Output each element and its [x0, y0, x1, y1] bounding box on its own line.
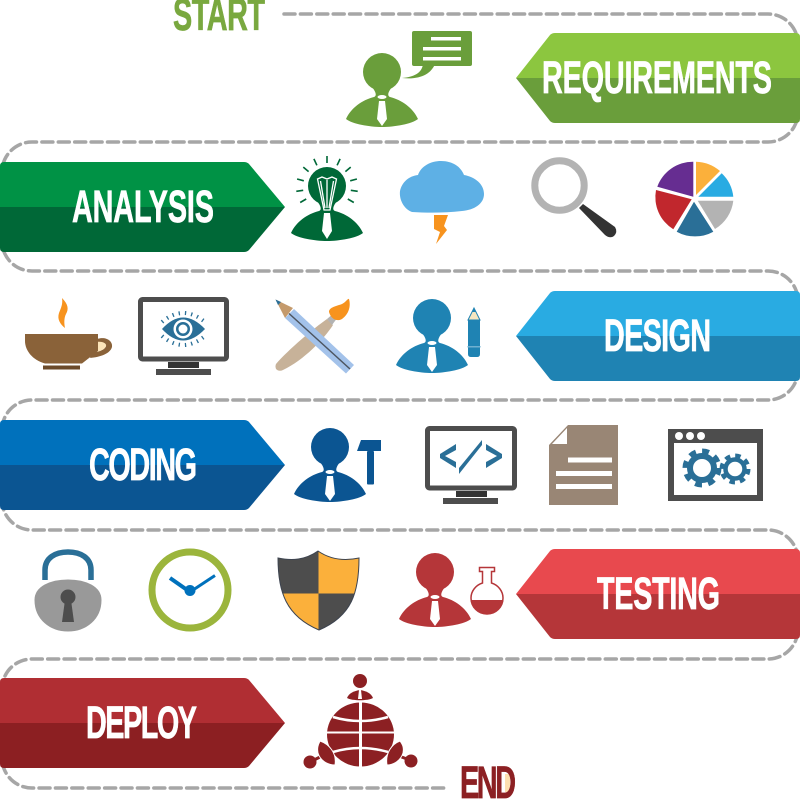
icon: person with hammer — [294, 428, 381, 502]
icon: shield — [278, 550, 360, 630]
icon: person with speech bubble — [346, 31, 472, 127]
banner: coding: CODING — [89, 441, 197, 491]
banner: analysis: ANALYSIS — [72, 183, 214, 233]
icon: browser window with gears — [668, 429, 763, 501]
banner: requirements: REQUIREMENTS — [542, 54, 772, 104]
icon: monitor with eye — [140, 300, 226, 375]
icon: coffee cup — [25, 298, 112, 370]
chart: pie icon — [655, 162, 733, 236]
icon: padlock — [34, 552, 102, 632]
icon: person with pencil — [396, 299, 480, 373]
icon: document — [549, 425, 618, 505]
icon: clock — [152, 552, 228, 628]
banner: coding — [0, 420, 285, 510]
icon: person with flask — [399, 553, 504, 627]
banner: deploy: DEPLOY — [86, 699, 197, 749]
icon: crossed pencil and brush — [276, 299, 354, 374]
icon: storm cloud — [400, 161, 484, 244]
banner: design — [516, 291, 800, 381]
icon: globe with people — [304, 674, 418, 768]
banner: testing: TESTING — [597, 570, 720, 620]
banner: requirements — [516, 33, 800, 123]
icon: magnifying glass — [535, 161, 616, 237]
icon: monitor with code — [428, 428, 514, 504]
banner: testing — [516, 549, 800, 639]
banner: analysis — [0, 162, 285, 252]
banner: design: DESIGN — [604, 312, 711, 362]
banner: deploy — [0, 678, 285, 768]
icon: person with light bulb head — [291, 156, 363, 241]
